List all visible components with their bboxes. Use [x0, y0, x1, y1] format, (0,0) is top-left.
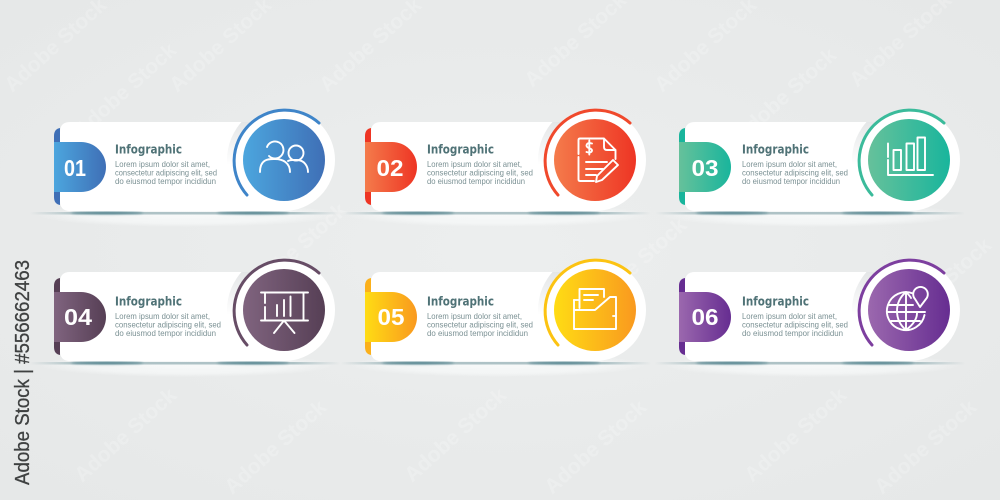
card 03 [661, 108, 960, 224]
progress arc [859, 260, 944, 345]
progress arc [234, 260, 319, 345]
progress arc [859, 110, 944, 195]
number: 01 [64, 155, 86, 181]
body text: do eiusmod tempor incididun [115, 176, 216, 186]
card shadow [30, 203, 340, 227]
stock watermarks: Adobe Stock [740, 383, 851, 487]
icon: folder with document [574, 289, 616, 329]
body text [427, 311, 533, 338]
icon circle [554, 119, 636, 201]
stock watermarks: Adobe Stock [220, 395, 331, 499]
card shadow [655, 203, 965, 227]
body text: consectetur adipiscing elit, sed [115, 168, 217, 178]
left fold [679, 128, 685, 205]
stock watermarks: Adobe Stock [580, 213, 691, 317]
number tab [54, 142, 106, 192]
card 04 [36, 258, 335, 374]
icon: bar chart [888, 138, 933, 175]
icon circle [868, 119, 950, 201]
card body [371, 262, 646, 361]
card shadow [341, 203, 651, 227]
card 02 [347, 108, 646, 223]
number: 04 [64, 304, 92, 330]
body text: Lorem ipsum dolor sit amet, [427, 159, 522, 169]
heading: Infographic [427, 142, 494, 156]
body text: consectetur adipiscing elit, sed [742, 168, 848, 178]
body text: consectetur adipiscing elit, sed [115, 320, 221, 330]
card 05 [347, 258, 646, 374]
left fold [365, 278, 371, 355]
heading: Infographic [115, 142, 182, 156]
body text: consectetur adipiscing elit, sed [427, 168, 533, 178]
number: 03 [692, 155, 718, 181]
heading: Infographic [427, 294, 494, 308]
left fold [54, 278, 60, 355]
number: 06 [692, 304, 718, 330]
icon: presentation board [261, 292, 308, 333]
card 01 [36, 108, 335, 224]
stock watermarks: Adobe Stock [730, 43, 841, 147]
number tab [54, 292, 106, 342]
icon circle [868, 269, 950, 351]
card body [60, 112, 335, 211]
card body [60, 262, 335, 361]
body text: do eiusmod tempor incididun [115, 328, 216, 338]
card body [685, 262, 960, 361]
card shadow [655, 353, 965, 377]
icon: document with pencil [578, 138, 618, 182]
stock watermarks: Adobe Stock [70, 383, 181, 487]
number: 02 [376, 155, 404, 181]
heading: Infographic [115, 294, 182, 308]
body text [115, 311, 221, 338]
number tab [365, 142, 417, 192]
body text: Lorem ipsum dolor sit amet, [427, 311, 522, 321]
card shadow [341, 353, 651, 377]
stock watermarks: Adobe Stock [70, 38, 181, 142]
body text: do eiusmod tempor incididun [427, 176, 525, 186]
card shadow [30, 353, 340, 377]
card body [685, 112, 960, 211]
number tab [679, 142, 731, 192]
stock watermarks: Adobe Stock [540, 395, 651, 499]
body text: Lorem ipsum dolor sit amet, [115, 311, 210, 321]
left fold [679, 278, 685, 355]
stock watermarks: Adobe Stock [400, 383, 511, 487]
card body [371, 112, 646, 211]
number tab [679, 292, 731, 342]
icon circle [243, 269, 325, 351]
side credit text: Adobe Stock | #556662463 [12, 260, 34, 485]
number: 05 [378, 304, 405, 330]
left fold [365, 128, 371, 205]
progress arc [545, 260, 630, 345]
heading: Infographic [742, 142, 809, 156]
stock watermarks: Adobe Stock [870, 395, 981, 499]
body text: Lorem ipsum dolor sit amet, [115, 159, 210, 169]
body text: Lorem ipsum dolor sit amet, [742, 159, 837, 169]
body text [742, 159, 848, 186]
left fold [54, 128, 60, 205]
icon: globe with pin [887, 287, 928, 330]
heading: Infographic [742, 294, 809, 308]
body text: consectetur adipiscing elit, sed [427, 320, 533, 330]
body text: do eiusmod tempor incididun [742, 176, 840, 186]
icon: people [260, 141, 308, 172]
body text [115, 159, 217, 186]
icon circle [243, 119, 325, 201]
stock watermarks: Adobe Stock [885, 233, 996, 337]
body text: Lorem ipsum dolor sit amet, [742, 311, 837, 321]
body text: do eiusmod tempor incididun [742, 328, 843, 338]
icon circle [554, 269, 636, 351]
body text [742, 311, 848, 338]
stock watermarks: Adobe Stock [240, 198, 351, 302]
card 06 [661, 258, 960, 374]
body text: consectetur adipiscing elit, sed [742, 320, 848, 330]
progress arc [545, 110, 630, 195]
body text: do eiusmod tempor incididun [427, 328, 528, 338]
body text [427, 159, 533, 186]
progress arc [234, 110, 319, 195]
number tab [365, 292, 417, 342]
